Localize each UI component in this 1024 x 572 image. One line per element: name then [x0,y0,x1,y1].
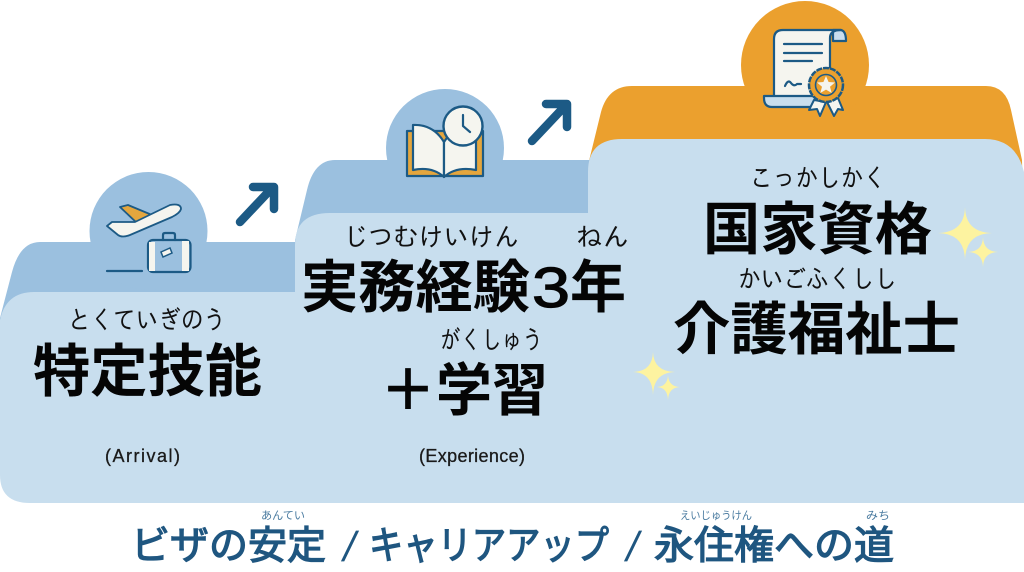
icon: sparkles upper [938,207,998,267]
tab: step 2 blue [295,89,590,260]
ruby: がくしゅう: がくしゅう [440,327,543,353]
footer tagline: ビザの安定 [131,515,326,571]
ruby: じつむけいけん: じつむけいけん [343,224,519,250]
footer tagline: / [339,523,361,570]
icon: open book and clock [407,106,483,177]
label: Arrival: (Arrival) [105,446,180,466]
icon: airplane and suitcase [107,204,190,272]
heading: 実務経験3年: 3 [532,256,570,320]
heading: 実務経験3年: 実務経験 [301,256,530,320]
ruby: とくていぎのう: とくていぎのう [68,307,226,333]
ruby: あんてい: あんてい [261,509,305,522]
icon: certificate scroll with seal [764,30,846,116]
label: Experience: (Experience) [419,446,525,466]
arrow: step 2 to step 3 [532,104,567,141]
panel: stepped light blue staircase [0,139,1024,503]
ruby: かいごふくしし: かいごふくしし [738,266,897,292]
ruby: こっかしかく: こっかしかく [750,165,886,191]
heading: 特定技能: 特定技能 [33,340,262,404]
footer tagline: / [622,523,644,570]
heading: 介護福祉士: 介護福祉士 [673,298,960,362]
footer tagline: 永住権への道 [654,515,894,571]
heading: 国家資格: 国家資格 [703,198,932,262]
heading: 実務経験3年: 年 [570,256,626,320]
tab: step 1 blue [0,172,298,340]
ruby: みち: みち [866,509,890,522]
footer tagline: キャリアアップ [369,515,609,571]
icon: sparkles lower [633,352,680,400]
tab: step 3 orange [588,1,1024,240]
footer tagline [131,515,894,571]
heading: ＋学習: ＋学習 [380,359,548,423]
ruby: ねん: ねん [576,224,629,250]
ruby: えいじゅうけん: えいじゅうけん [680,509,752,522]
arrow: step 1 to step 2 [240,187,274,222]
